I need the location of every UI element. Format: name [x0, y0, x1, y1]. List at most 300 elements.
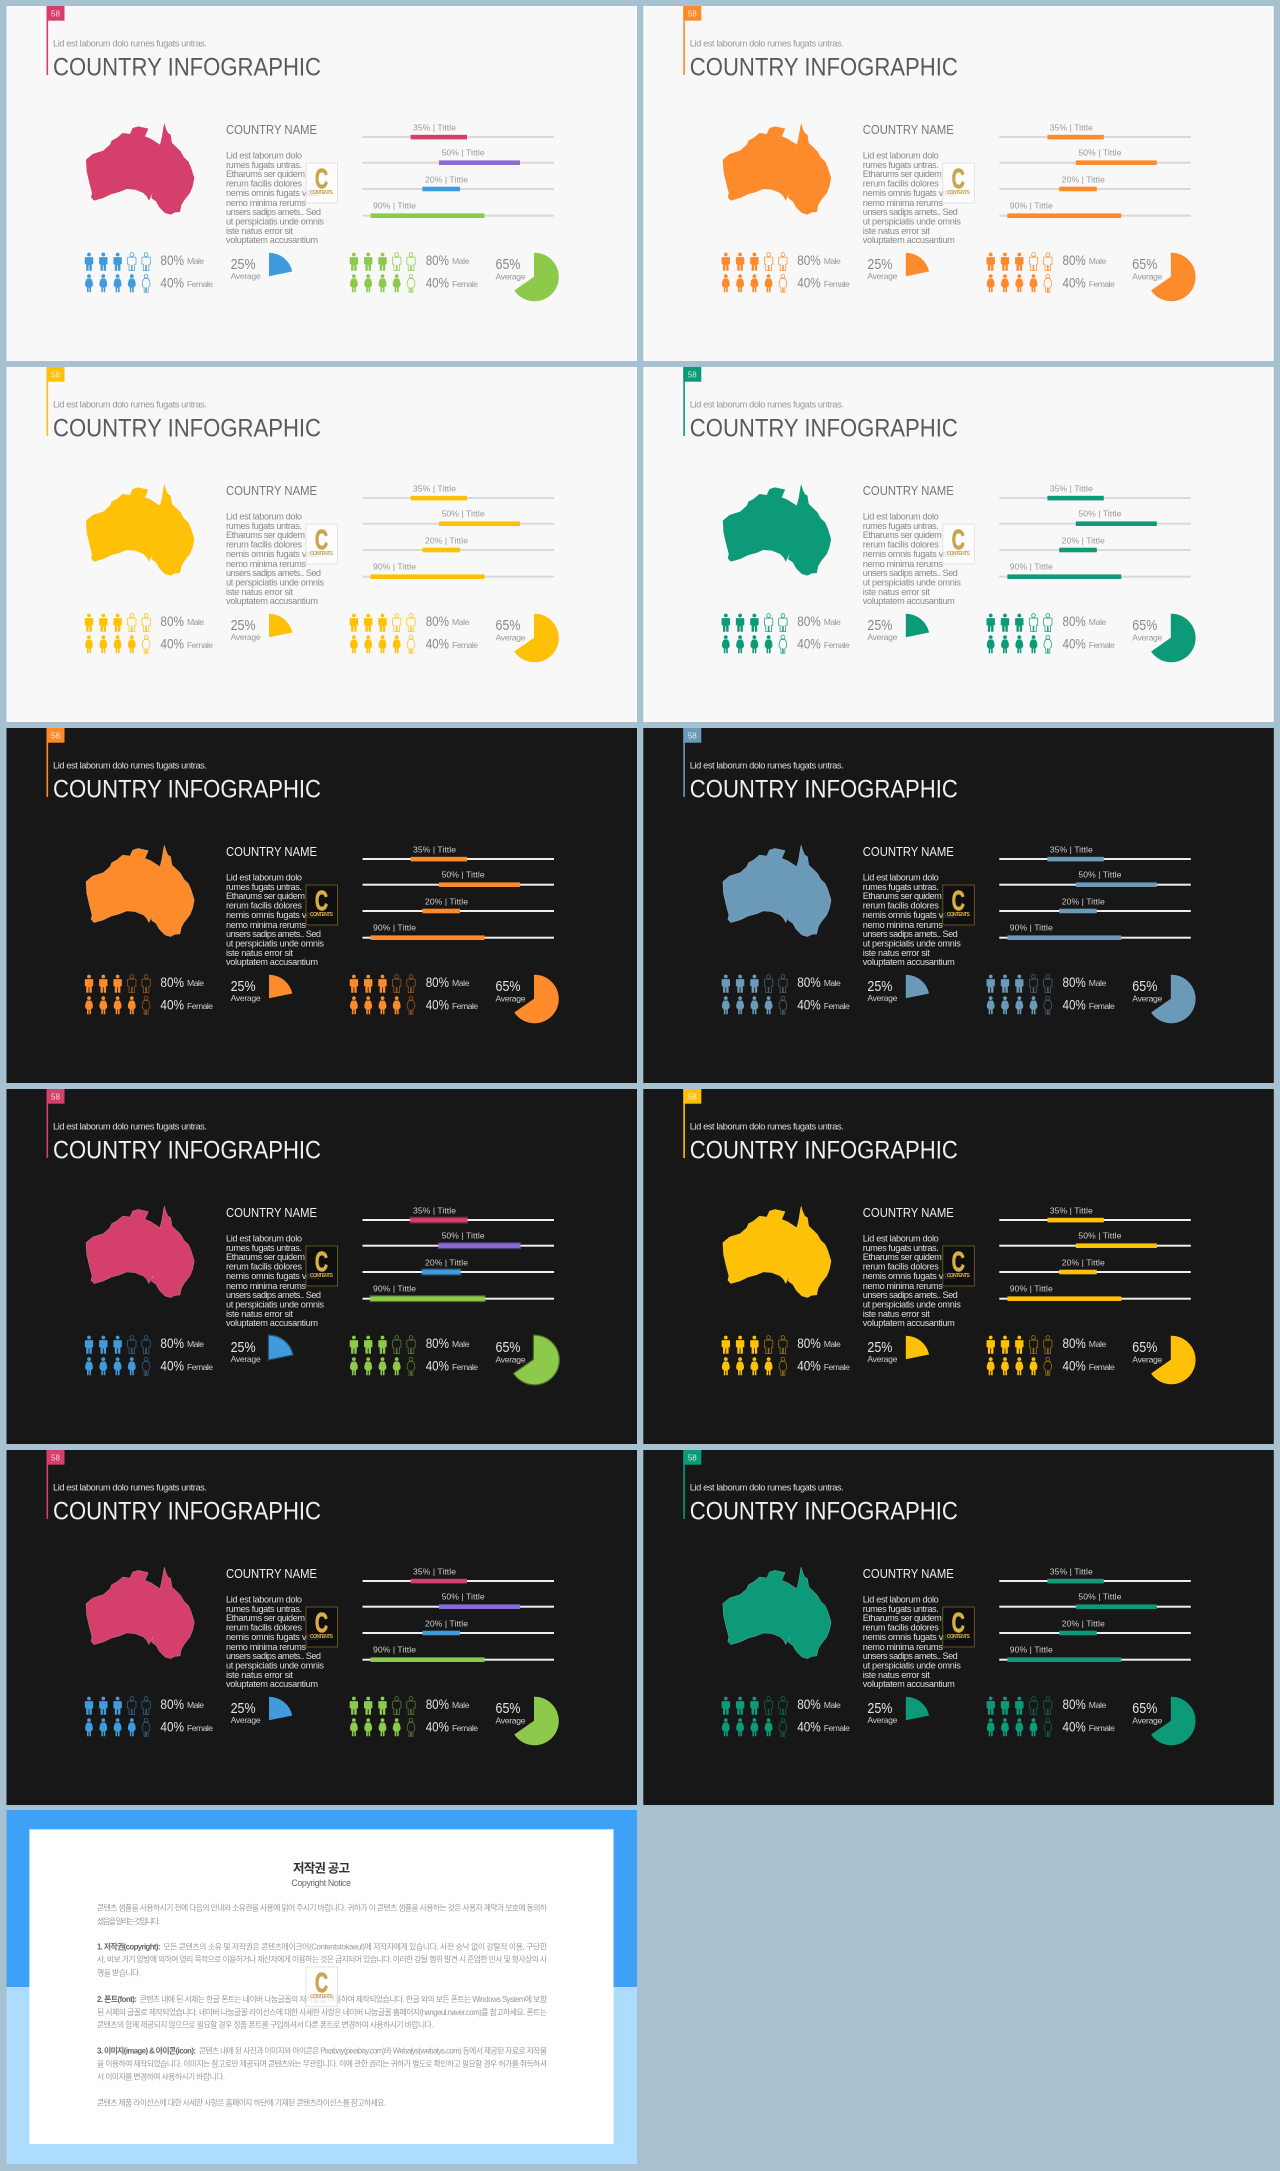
stats right: Male	[452, 978, 470, 988]
watermark	[943, 1246, 974, 1286]
pie label 25%	[867, 979, 898, 1003]
copyright section 2	[97, 1994, 547, 2030]
title: COUNTRY INFOGRAPHIC	[53, 1136, 321, 1164]
pie label 65%: 65%	[1132, 257, 1157, 273]
subtitle: Lid est laborum dolo rumes fugats untras.	[690, 1482, 844, 1492]
bar chart: 50% | Tittle	[442, 509, 485, 519]
bar chart: 35% | Tittle	[413, 1205, 456, 1215]
pie label 65%: Average	[496, 993, 526, 1003]
stats left	[160, 975, 213, 1013]
paragraph: rerum facilis dolores	[226, 1622, 302, 1632]
watermark: CONTENTS	[947, 1634, 970, 1640]
pie 25%	[269, 253, 292, 276]
copyright section 3: 콘텐츠 내에 된 사진과 이미지와 아이콘은 Pixabay(pixabay.com)와 Webalys(webalys.com) 등에서 제공된 자료로 저작물	[199, 2046, 547, 2056]
paragraph: ut perspiciatis unde omnis	[863, 578, 961, 588]
watermark: CONTENTS	[310, 190, 334, 196]
watermark	[943, 885, 974, 925]
stats right: 80%	[1062, 1697, 1086, 1712]
pie label 25%	[231, 1701, 261, 1725]
copyright section 1: 모든 콘텐츠의 소유 및 저작권은 콘텐츠메이크어(Contentstokaeul)에 저작자에게 있습니다. 사전 승낙 없이 강탈적 이용, 구단한	[163, 1942, 547, 1952]
paragraph: Etharums ser quidem	[226, 1252, 305, 1262]
paragraph: ut perspiciatis unde omnis	[226, 216, 324, 226]
title: COUNTRY INFOGRAPHIC	[690, 1497, 958, 1525]
pie label 25%: 25%	[867, 979, 892, 995]
map	[86, 845, 194, 937]
paragraph: Lid est laborum dolo	[863, 1234, 939, 1244]
bar chart: 90% | Tittle	[373, 1284, 416, 1294]
stats right: 40%	[1062, 637, 1086, 652]
watermark	[306, 1967, 338, 2006]
stats left	[160, 614, 213, 652]
stats right: Female	[1089, 1723, 1115, 1733]
paragraph: ut perspiciatis unde omnis	[226, 1660, 324, 1670]
pie label 65%: Average	[1132, 1715, 1163, 1725]
bar chart	[362, 122, 554, 218]
paragraph: nemis omnis fugats vitae	[226, 188, 320, 198]
bar chart: 90% | Tittle	[1010, 1645, 1053, 1655]
paragraph: nemis omnis fugats vitae	[226, 1632, 320, 1642]
paragraph: rumes fugats untras.	[226, 160, 302, 170]
stats left	[160, 1336, 213, 1374]
paragraph: rerum facilis dolores	[226, 1262, 302, 1272]
pie label 65%	[496, 257, 526, 281]
bar chart: 20% | Tittle	[1062, 896, 1105, 906]
paragraph: nemis omnis fugats vitae	[226, 910, 320, 920]
copyright section 1: 행을 받습니다.	[97, 1968, 141, 1978]
stats right: 40%	[1062, 276, 1086, 291]
stats right: Female	[452, 1001, 478, 1011]
copyright intro	[97, 1902, 547, 1926]
page tag	[683, 6, 701, 75]
country name: COUNTRY NAME	[863, 1567, 954, 1581]
paragraph: rerum facilis dolores	[226, 178, 302, 188]
bar chart: 35% | Tittle	[413, 844, 456, 854]
bar chart	[362, 1205, 554, 1301]
stats left: 40%	[160, 637, 184, 652]
paragraph: iste natus error sit	[226, 587, 293, 597]
watermark	[306, 524, 338, 564]
pie label 65%: 65%	[1132, 618, 1157, 634]
stats right: Male	[1089, 1700, 1107, 1710]
watermark: C	[315, 163, 328, 194]
watermark: C	[952, 524, 965, 555]
pie label 25%: 25%	[231, 618, 256, 634]
slide 6: dark steel blue	[643, 728, 1274, 1083]
stats right	[426, 975, 478, 1013]
watermark: CONTENTS	[310, 1634, 334, 1640]
people right	[986, 614, 1052, 653]
stats left	[797, 975, 850, 1013]
stats right: 40%	[426, 1720, 449, 1735]
bar chart: 20% | Tittle	[425, 1618, 468, 1628]
pie label 25%	[867, 618, 898, 642]
bar chart: 35% | Tittle	[1050, 483, 1093, 493]
paragraph: voluptatem accusantium	[226, 957, 318, 967]
paragraph: rumes fugats untras.	[226, 1243, 302, 1253]
watermark: C	[315, 1607, 328, 1638]
pie 25%	[906, 614, 929, 637]
stats right: Male	[452, 1700, 470, 1710]
people left	[85, 1336, 150, 1375]
paragraph: nemo minima rerums	[226, 198, 306, 208]
pie label 65%: Average	[496, 1354, 526, 1364]
paragraph: rerum facilis dolores	[863, 1622, 939, 1632]
bar chart: 50% | Tittle	[1078, 509, 1122, 519]
bar chart	[999, 844, 1191, 940]
copyright section 3: 을 이용하여 제작되었습니다. 이미지는 참고로만 제공되며 콘텐츠와는 무관합니다. 이에 관한 권리는 귀하가 별도로 확인하고 필요할 경우 허가를 취득하셔	[97, 2058, 547, 2068]
stats left: Male	[187, 1339, 204, 1349]
pie label 25%: 25%	[867, 257, 892, 273]
bar chart: 50% | Tittle	[1078, 870, 1122, 880]
paragraph: nemo minima rerums	[226, 1642, 306, 1652]
title: COUNTRY INFOGRAPHIC	[53, 414, 321, 442]
country name: COUNTRY NAME	[226, 1567, 317, 1581]
paragraph: iste natus error sit	[863, 587, 930, 597]
pie 65%	[1151, 975, 1196, 1023]
country name: COUNTRY NAME	[863, 484, 954, 498]
map	[86, 1206, 194, 1298]
bar chart: 90% | Tittle	[1010, 923, 1053, 933]
stats left: 80%	[160, 975, 184, 990]
stats left: Female	[187, 1723, 213, 1733]
paragraph: Etharums ser quidem	[863, 1613, 942, 1623]
stats right: 80%	[426, 1697, 449, 1712]
paragraph: nemo minima rerums	[863, 198, 943, 208]
stats right: 80%	[426, 975, 449, 990]
paragraph: Lid est laborum dolo	[863, 150, 939, 160]
copyright section 2: 콘텐츠의 함께 제공되지 않으므로 필요할 경우 정품 폰트를 구입하셔서 다른 폰트로 변경하여 사용하시기 바랍니다.	[97, 2020, 434, 2030]
people left	[722, 975, 787, 1014]
paragraph: Etharums ser quidem	[863, 169, 942, 179]
page tag: 58	[688, 1092, 697, 1102]
bar chart: 90% | Tittle	[1010, 562, 1053, 572]
stats right: Female	[452, 640, 478, 650]
slide 3: light yellow	[6, 367, 637, 722]
stats right: Male	[452, 617, 470, 627]
paragraph: rerum facilis dolores	[226, 540, 302, 550]
bar chart: 50% | Tittle	[1078, 1592, 1122, 1602]
copyright heading: Copyright Notice	[291, 1878, 351, 1888]
people left	[85, 253, 150, 292]
paragraph: nemis omnis fugats vitae	[863, 549, 957, 559]
pie label 65%: Average	[496, 271, 526, 281]
stats right: 40%	[426, 998, 449, 1013]
bar chart: 20% | Tittle	[1062, 174, 1105, 184]
stats left: Male	[824, 256, 841, 266]
copyright heading	[291, 1860, 351, 1888]
bar chart: 35% | Tittle	[413, 122, 456, 132]
paragraph: iste natus error sit	[863, 1309, 930, 1319]
watermark: C	[315, 1967, 328, 1998]
paragraph: Etharums ser quidem	[226, 1613, 305, 1623]
title: COUNTRY INFOGRAPHIC	[690, 775, 958, 803]
paragraph: rumes fugats untras.	[863, 1604, 939, 1614]
map	[723, 1206, 831, 1298]
people left	[722, 614, 787, 653]
pie label 65%	[496, 1701, 526, 1725]
pie label 25%: 25%	[231, 979, 256, 995]
map	[86, 484, 194, 576]
pie 65%	[514, 975, 559, 1023]
bar chart: 90% | Tittle	[373, 923, 416, 933]
panel: copyright notice	[6, 1810, 637, 2164]
paragraph: nemo minima rerums	[863, 1281, 943, 1291]
pie label 65%	[496, 979, 526, 1003]
pie 25%	[906, 253, 929, 276]
watermark: CONTENTS	[947, 190, 970, 196]
stats left: 80%	[160, 1336, 184, 1351]
paragraph: voluptatem accusantium	[863, 1318, 955, 1328]
pie 25%	[269, 1697, 292, 1720]
pie label 25%: Average	[867, 1715, 898, 1725]
slide 2: light orange	[643, 6, 1274, 361]
watermark: CONTENTS	[310, 1273, 334, 1279]
bar chart: 90% | Tittle	[373, 201, 416, 211]
people left	[722, 253, 787, 292]
people right	[986, 253, 1052, 292]
page tag	[683, 728, 701, 797]
bar chart: 20% | Tittle	[425, 1257, 468, 1267]
paragraph: nemo minima rerums	[226, 559, 306, 569]
bar chart	[362, 1566, 554, 1662]
pie label 25%: Average	[231, 993, 261, 1003]
paragraph: unsers sadips amets.. Sed	[863, 929, 958, 939]
stats right: Female	[1089, 1362, 1115, 1372]
paragraph	[863, 512, 961, 606]
paragraph: Lid est laborum dolo	[863, 872, 939, 882]
bar chart: 20% | Tittle	[425, 535, 468, 545]
people left	[85, 1697, 150, 1736]
subtitle: Lid est laborum dolo rumes fugats untras.	[53, 38, 207, 48]
bar chart: 50% | Tittle	[1078, 148, 1122, 158]
pie label 65%: Average	[1132, 632, 1163, 642]
watermark	[306, 1607, 338, 1647]
page tag	[683, 367, 701, 436]
bar chart: 50% | Tittle	[442, 1592, 485, 1602]
copyright section 3	[97, 2046, 547, 2082]
watermark: CONTENTS	[310, 1994, 334, 2000]
stats right: Female	[1089, 640, 1115, 650]
pie 65%	[514, 1697, 559, 1745]
copyright closing line: 콘텐츠 제품 라이선스에 대한 사세한 사항은 홈페이지 하단에 기재된 콘텐츠라이선스를 참고하세요.	[97, 2098, 386, 2108]
pie label 65%	[1132, 1701, 1163, 1725]
pie label 25%: 25%	[231, 1701, 256, 1717]
slide 5: dark orange	[6, 728, 637, 1083]
paragraph: Lid est laborum dolo	[863, 512, 939, 522]
paragraph: voluptatem accusantium	[863, 1679, 955, 1689]
paragraph: iste natus error sit	[863, 1670, 930, 1680]
stats left	[797, 1697, 850, 1735]
pie label 25%: 25%	[231, 257, 256, 273]
page tag: 58	[688, 1454, 697, 1462]
stats left: Male	[187, 1700, 204, 1710]
title: COUNTRY INFOGRAPHIC	[690, 414, 958, 442]
page tag	[683, 1089, 701, 1158]
paragraph: ut perspiciatis unde omnis	[863, 1660, 961, 1670]
page tag	[46, 1450, 64, 1519]
country name: COUNTRY NAME	[226, 123, 317, 137]
paragraph: Etharums ser quidem	[226, 169, 305, 179]
pie label 25%	[231, 979, 261, 1003]
watermark: C	[315, 524, 328, 555]
bar chart: 90% | Tittle	[373, 1645, 416, 1655]
subtitle: Lid est laborum dolo rumes fugats untras.	[690, 1122, 844, 1132]
subtitle: Lid est laborum dolo rumes fugats untras.	[690, 760, 844, 770]
stats left: 40%	[797, 276, 821, 291]
bar chart: 90% | Tittle	[1010, 1284, 1053, 1294]
pie label 65%: Average	[496, 632, 526, 642]
stats left: 80%	[797, 614, 821, 629]
watermark	[306, 885, 338, 925]
watermark	[943, 524, 974, 564]
paragraph: rerum facilis dolores	[863, 540, 939, 550]
paragraph: ut perspiciatis unde omnis	[226, 578, 324, 588]
subtitle: Lid est laborum dolo rumes fugats untras.	[53, 1482, 207, 1492]
stats right: Male	[452, 256, 470, 266]
pie label 65%: 65%	[496, 1701, 521, 1717]
bar chart: 20% | Tittle	[1062, 1618, 1105, 1628]
stats right	[1062, 1697, 1115, 1735]
copyright section 2: 2. 폰트(font):	[97, 1995, 137, 2004]
pie label 65%: Average	[1132, 1354, 1163, 1364]
watermark: C	[952, 1607, 965, 1638]
page tag: 58	[688, 10, 697, 18]
subtitle: Lid est laborum dolo rumes fugats untras.	[53, 1122, 207, 1132]
stats right	[1062, 253, 1115, 291]
title: COUNTRY INFOGRAPHIC	[53, 53, 321, 81]
pie label 25%	[867, 1701, 898, 1725]
paragraph: rerum facilis dolores	[863, 1262, 939, 1272]
paragraph: voluptatem accusantium	[226, 1318, 318, 1328]
pie label 25%: Average	[867, 993, 898, 1003]
paragraph	[226, 150, 324, 245]
watermark	[306, 1246, 338, 1286]
stats left: 80%	[160, 1697, 184, 1712]
paragraph: voluptatem accusantium	[226, 1679, 318, 1689]
stats right	[1062, 975, 1115, 1013]
paragraph: unsers sadips amets.. Sed	[863, 207, 958, 217]
pie label 25%	[867, 257, 898, 281]
stats right: Female	[1089, 1001, 1115, 1011]
bar chart: 50% | Tittle	[442, 148, 485, 158]
paragraph: ut perspiciatis unde omnis	[863, 938, 961, 948]
page tag: 58	[51, 370, 60, 380]
map	[86, 1567, 194, 1659]
pie 65%	[1151, 1336, 1196, 1384]
pie label 25%	[231, 257, 261, 281]
stats right	[426, 1336, 478, 1374]
stats right: Male	[1089, 256, 1107, 266]
paragraph: Lid est laborum dolo	[226, 1594, 302, 1604]
page tag: 58	[51, 1092, 60, 1102]
stats left: 80%	[160, 253, 184, 268]
map	[723, 1567, 831, 1659]
paragraph: unsers sadips amets.. Sed	[226, 929, 321, 939]
paragraph: rumes fugats untras.	[226, 521, 302, 531]
paragraph: Etharums ser quidem	[863, 530, 942, 540]
stats right	[426, 1697, 478, 1735]
paragraph	[863, 1594, 961, 1689]
stats right: 80%	[426, 253, 449, 268]
stats left: 40%	[160, 276, 184, 291]
page tag	[683, 1450, 701, 1519]
paragraph: ut perspiciatis unde omnis	[226, 1300, 324, 1310]
page tag	[46, 728, 64, 797]
pie 25%	[269, 1336, 292, 1359]
stats right: 80%	[426, 1336, 449, 1351]
people right	[350, 975, 415, 1014]
stats right: 40%	[426, 637, 449, 652]
copyright intro: 셨음을 알리는 것입니다.	[97, 1916, 160, 1926]
paragraph: voluptatem accusantium	[863, 957, 955, 967]
stats left: Male	[824, 1700, 841, 1710]
paragraph: iste natus error sit	[226, 948, 293, 958]
stats left: Female	[187, 1001, 213, 1011]
pie label 25%	[867, 1340, 898, 1364]
paragraph: rerum facilis dolores	[863, 178, 939, 188]
people right	[986, 1697, 1052, 1736]
subtitle: Lid est laborum dolo rumes fugats untras.	[53, 400, 207, 410]
pie label 65%	[1132, 1340, 1163, 1364]
pie label 65%: Average	[496, 1715, 526, 1725]
bar chart	[362, 844, 554, 940]
paragraph: Lid est laborum dolo	[226, 512, 302, 522]
pie label 65%: Average	[1132, 993, 1163, 1003]
stats right: Male	[1089, 978, 1107, 988]
bar chart: 90% | Tittle	[373, 562, 416, 572]
map	[723, 484, 831, 576]
bar chart	[999, 1566, 1191, 1662]
pie label 65%: 65%	[1132, 979, 1157, 995]
bar chart	[999, 122, 1191, 218]
subtitle: Lid est laborum dolo rumes fugats untras.	[690, 400, 844, 410]
watermark: C	[315, 885, 328, 916]
people right	[986, 975, 1052, 1014]
paragraph: ut perspiciatis unde omnis	[863, 1300, 961, 1310]
page tag: 58	[688, 732, 697, 740]
stats left: Female	[824, 279, 850, 289]
paragraph	[226, 1594, 324, 1689]
copyright section 2: 콘텐츠 내에 된 서체는 한글 폰트는 네이버 나눔글꼴의 저작물을 이용하여 제작되었습니다. 한글 외의 보든 폰트는 Windows System에 보함	[140, 1994, 547, 2004]
page tag: 58	[51, 1454, 60, 1462]
watermark: CONTENTS	[947, 551, 970, 557]
bar chart: 20% | Tittle	[1062, 1257, 1105, 1267]
copyright heading: 저작권 공고	[293, 1860, 350, 1876]
pie 65%	[1151, 1697, 1196, 1745]
stats left: Female	[824, 1362, 850, 1372]
pie label 25%: Average	[231, 1715, 261, 1725]
paragraph: nemis omnis fugats vitae	[863, 1271, 957, 1281]
copyright section 2: 된 서체의 글꼴로 제작되었습니다. 네이버 나눔글꼴 라이선스에 대한 사세한 사항은 네이버 나눔글꼴 홈페이지(hangeul.naver.com)를 참고하세요. 폰트는	[97, 2007, 547, 2017]
stats left: Male	[187, 256, 204, 266]
stats left: Female	[824, 1001, 850, 1011]
country name: COUNTRY NAME	[226, 484, 317, 498]
bar chart: 50% | Tittle	[442, 870, 485, 880]
bar chart	[999, 1205, 1191, 1301]
watermark: CONTENTS	[310, 551, 334, 557]
paragraph: unsers sadips amets.. Sed	[863, 1290, 958, 1300]
paragraph: unsers sadips amets.. Sed	[226, 1651, 321, 1661]
stats right	[1062, 1336, 1115, 1374]
bar chart: 20% | Tittle	[425, 174, 468, 184]
paragraph: voluptatem accusantium	[226, 596, 318, 606]
bar chart: 50% | Tittle	[1078, 1231, 1122, 1241]
stats left	[160, 253, 213, 291]
stats left	[797, 614, 850, 652]
paragraph: nemo minima rerums	[863, 1642, 943, 1652]
people left	[722, 1697, 787, 1736]
paragraph: nemo minima rerums	[863, 920, 943, 930]
